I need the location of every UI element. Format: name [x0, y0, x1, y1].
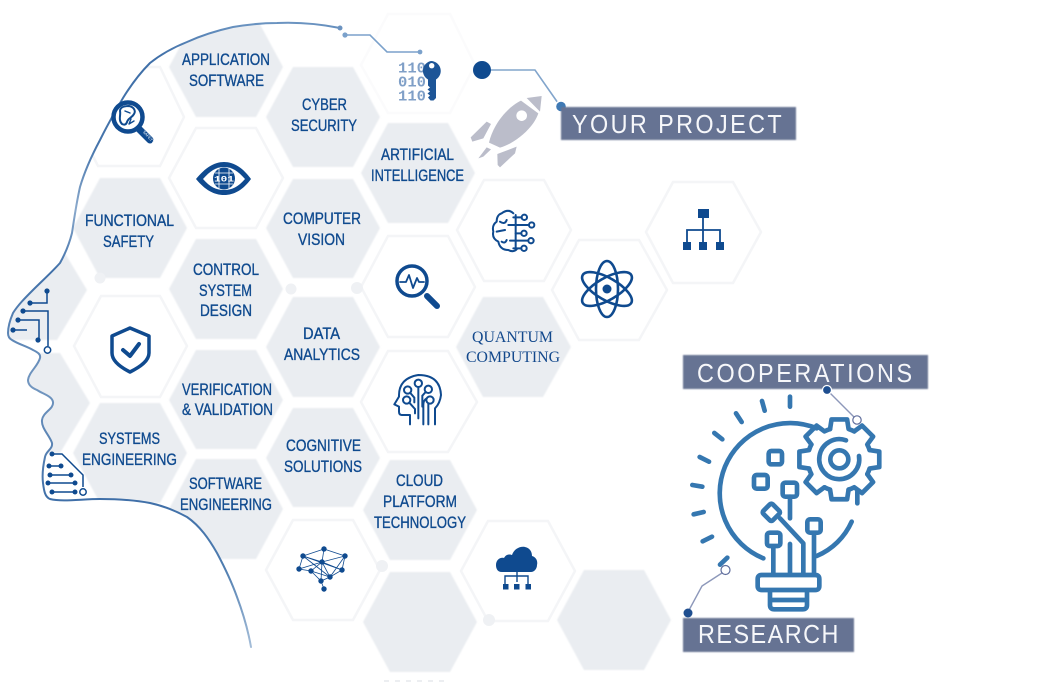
label: CLOUD — [396, 472, 443, 490]
label: APPLICATION — [182, 51, 270, 69]
label: SOFTWARE — [189, 72, 264, 90]
label: SAFETY — [103, 233, 154, 251]
label: SYSTEMS — [99, 430, 160, 448]
icon: eye with binary: 101 — [214, 174, 234, 184]
head mask — [0, 0, 340, 683]
panel: functional safety — [73, 178, 187, 278]
icon: circuit brain — [493, 211, 534, 251]
icon: safety ear magnifier: SAFETY — [142, 129, 156, 144]
panel: brain hexagon — [457, 180, 571, 281]
icon: binary key: 110 — [398, 60, 426, 78]
label: TECHNOLOGY — [374, 514, 466, 532]
rocket connector — [473, 61, 566, 112]
panel: cloud network hexagon — [461, 521, 575, 621]
label — [283, 210, 361, 249]
label — [180, 475, 272, 514]
icon: safety ear magnifier — [114, 102, 156, 144]
icon: org chart — [683, 209, 724, 250]
panel: control system design — [169, 239, 283, 339]
panel: blank hexagon right — [557, 570, 671, 670]
icon: shield with check — [112, 328, 149, 372]
small connector dots — [94, 272, 495, 626]
banner: research — [683, 618, 854, 652]
panel: network hexagon — [266, 520, 380, 620]
label: CONTROL — [193, 261, 259, 279]
label: SECURITY — [291, 117, 357, 135]
panel: AI head hexagon — [361, 351, 477, 452]
label — [193, 261, 259, 320]
head outline — [8, 23, 340, 647]
icon: AI head — [394, 375, 441, 424]
panel: artificial intelligence — [361, 123, 475, 223]
research connector — [684, 566, 730, 618]
bulb base — [758, 575, 819, 609]
cooperations connector — [822, 386, 861, 424]
label: ANALYTICS — [284, 346, 360, 364]
panel: key hexagon — [361, 14, 475, 113]
panel: atom hexagon — [552, 240, 667, 340]
label: SOFTWARE — [189, 475, 262, 493]
label — [466, 329, 560, 366]
icon: chin circuit — [46, 452, 86, 495]
icon: binary key: 010 — [398, 74, 426, 92]
banner: cooperations: COOPERATIONS — [697, 360, 912, 388]
panel: left clipped hexagon upper — [0, 240, 87, 340]
label: & VALIDATION — [182, 401, 273, 419]
icon: forehead circuit — [10, 288, 51, 353]
panel: software engineering — [169, 459, 283, 559]
icon: eye with binary — [196, 162, 251, 195]
label: COMPUTER — [283, 210, 361, 228]
label: DATA — [303, 325, 340, 343]
label: COGNITIVE — [286, 437, 361, 455]
panel: left clipped hexagon lower — [0, 353, 90, 453]
label — [284, 437, 362, 476]
panel: systems engineering — [73, 403, 187, 503]
label: PLATFORM — [383, 493, 457, 511]
icon: network — [296, 546, 348, 592]
panel: cognitive solutions — [266, 408, 380, 507]
label — [85, 212, 174, 251]
label: INTELLIGENCE — [371, 167, 464, 185]
bulb glass — [720, 423, 852, 558]
icon: rocket — [471, 96, 542, 167]
panel: computer vision — [266, 179, 380, 278]
label: COMPUTING — [466, 349, 560, 366]
panel: shield hexagon — [74, 296, 187, 397]
label: VISION — [298, 231, 345, 249]
label: VERIFICATION — [182, 381, 272, 399]
gear — [799, 419, 879, 499]
icon: light bulb with gear — [692, 397, 879, 609]
panel: magnifier hexagon — [361, 236, 475, 337]
banner: your project: YOUR PROJECT — [572, 111, 782, 139]
label: SYSTEM — [199, 282, 252, 300]
light rays — [692, 397, 790, 565]
bottom clipped hexagon edge — [384, 680, 450, 682]
panel: data analytics — [266, 297, 380, 397]
label — [284, 325, 360, 364]
icon: binary key: 110 — [398, 88, 426, 106]
panel: org chart hexagon — [646, 182, 761, 283]
panel: cyber security — [266, 67, 380, 167]
label: QUANTUM — [472, 329, 553, 346]
label — [82, 430, 177, 469]
label: SOLUTIONS — [284, 458, 362, 476]
panel: safety magnifier hexagon — [73, 67, 184, 166]
icon: atom — [577, 261, 637, 317]
panel: blank hexagon centre — [363, 572, 477, 672]
label — [182, 381, 273, 419]
label: ENGINEERING — [82, 451, 177, 469]
banner: research: RESEARCH — [698, 621, 838, 649]
circuit — [773, 497, 814, 573]
panel: cloud platform technology — [363, 460, 477, 560]
icon: cloud network — [496, 547, 537, 590]
panel: verification and validation — [169, 350, 283, 449]
label — [371, 146, 464, 185]
label: FUNCTIONAL — [85, 212, 174, 230]
label: ENGINEERING — [180, 496, 272, 514]
label: CYBER — [302, 96, 347, 114]
label — [291, 96, 357, 135]
label — [374, 472, 466, 532]
label: ARTIFICIAL — [381, 146, 454, 164]
head end dot — [338, 26, 342, 30]
label: DESIGN — [200, 302, 252, 320]
panel: application software — [169, 17, 283, 117]
label — [182, 51, 270, 90]
panel: quantum computing — [456, 297, 571, 397]
key connector line — [342, 32, 422, 54]
panel: eye hexagon — [169, 128, 283, 228]
icon: data magnifier — [397, 266, 437, 306]
icon: binary key — [398, 60, 441, 106]
